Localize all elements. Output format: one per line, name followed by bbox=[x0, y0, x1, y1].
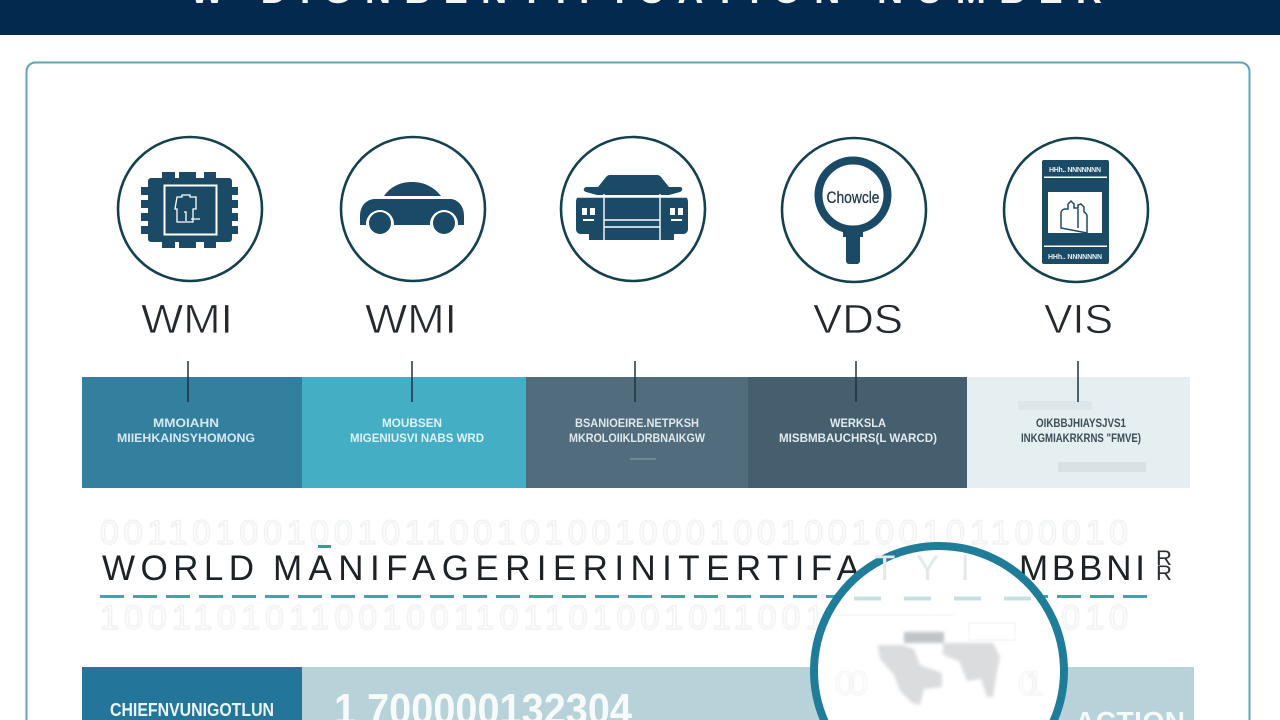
world map bbox=[878, 632, 1000, 705]
segment 3: BSANIOEIRE.NETPKSH bbox=[575, 418, 699, 430]
icon: document card bbox=[1004, 138, 1148, 282]
segment 3 bbox=[526, 377, 748, 488]
segment 3: MKROLOIIKLDRBNAIKGW bbox=[569, 433, 705, 445]
faded heading letters: T Y I bbox=[874, 549, 970, 588]
bottom label box: CHIEFNVUNIGOTLUN bbox=[110, 700, 274, 720]
connector lines bbox=[188, 361, 1078, 402]
segment 2: MIGENIUSVI NABS WRD bbox=[350, 433, 484, 445]
magnifier with world map bbox=[814, 546, 1064, 720]
label: VDS: VDS bbox=[813, 296, 903, 342]
faded binary fragments: 01 bbox=[1018, 665, 1044, 703]
heading end stacked R: R bbox=[1156, 547, 1172, 570]
icon: car front view bbox=[561, 137, 705, 281]
icon: microchip bbox=[118, 137, 262, 281]
binary row top: 00110100100101100101001000100100100101100010 bbox=[100, 514, 1128, 552]
heading: manifagerier: MANIFAGERIERINITERTIFA bbox=[273, 549, 861, 588]
segment 1 bbox=[82, 377, 302, 488]
segment 1: MMOIAHN bbox=[153, 418, 219, 430]
icon: car side view bbox=[341, 137, 485, 281]
bottom value band bbox=[302, 667, 1194, 720]
heading accent bbox=[318, 545, 331, 548]
segment 2: MOUBSEN bbox=[382, 418, 442, 430]
segment 1: MIIEHKAINSYHOMONG bbox=[117, 433, 255, 445]
header band bbox=[0, 0, 1280, 35]
segment 5: OIKBBJHIAYSJVS1 bbox=[1036, 418, 1127, 430]
binary row bottom: 10011010110010011011010010110011101010011010 bbox=[100, 599, 1128, 637]
faded dashes bbox=[854, 596, 1036, 600]
segment 4 bbox=[748, 377, 967, 488]
bottom label box bbox=[82, 667, 302, 720]
heading: world: WORLD bbox=[102, 549, 254, 588]
icon: document card: HHh.. NNNNNNN bbox=[1048, 254, 1102, 261]
icon: document card: HHh.. NNNNNNN bbox=[1049, 167, 1101, 174]
label: VIS: VIS bbox=[1044, 296, 1113, 342]
icon: magnifying glass: Chowcle bbox=[826, 188, 880, 207]
faded binary fragments bbox=[833, 615, 1044, 703]
segment 5 bbox=[967, 377, 1190, 488]
heading end stacked R bbox=[1156, 547, 1172, 585]
heading end stacked R: R bbox=[1156, 562, 1172, 585]
segment 4: MISBMBAUCHRS(L WARCD) bbox=[779, 433, 937, 445]
label: WMI: WMI bbox=[141, 296, 233, 342]
icon: magnifying glass bbox=[782, 138, 926, 282]
label: WMI second: WMI bbox=[365, 296, 457, 342]
dashed teal rule bbox=[100, 595, 1150, 598]
segment 5: INKGMIAKRKRNS "FMVE) bbox=[1021, 433, 1141, 445]
segment 4: WERKSLA bbox=[830, 418, 886, 430]
faded binary fragments: 00 bbox=[835, 665, 868, 703]
heading end letters: MBBNI bbox=[1019, 549, 1145, 588]
segment 2 bbox=[302, 377, 526, 488]
